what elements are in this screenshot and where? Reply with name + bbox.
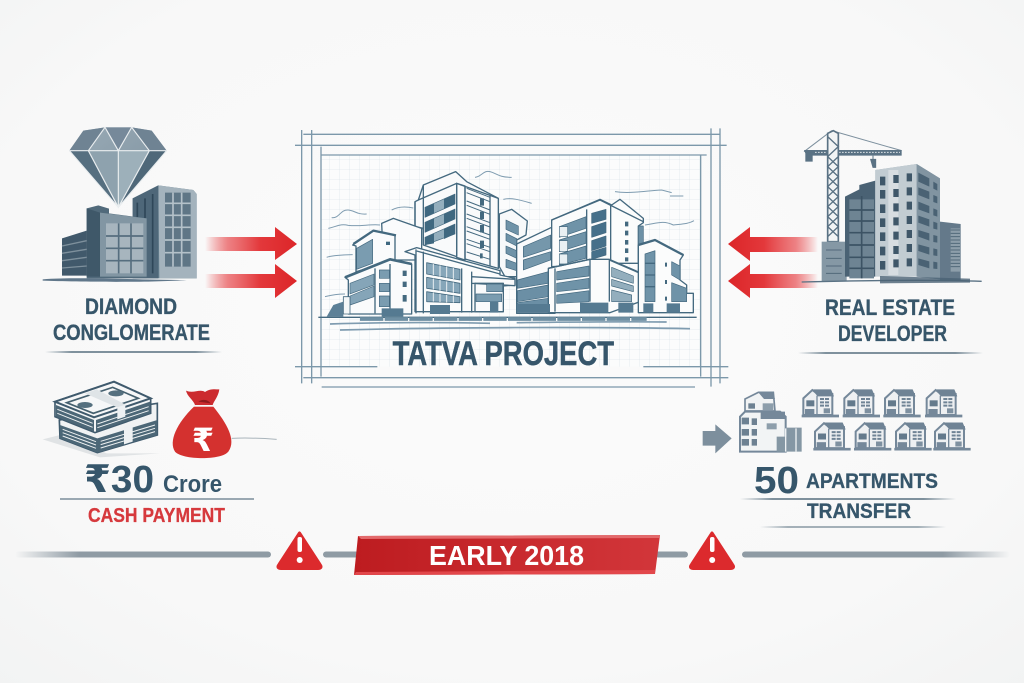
right lower block xyxy=(548,259,642,313)
amount: 30 crore xyxy=(84,459,222,501)
left back block xyxy=(382,218,422,260)
base details xyxy=(327,302,343,317)
panel: apartments transfer xyxy=(703,389,971,528)
amount: 50 apartments: 50 xyxy=(754,460,799,502)
heading: diamond conglomerate: CONGLOMERATE xyxy=(53,320,210,345)
timeline xyxy=(15,533,1010,575)
arrows: from developer to project xyxy=(728,227,818,298)
label: cash payment: CASH PAYMENT xyxy=(88,505,225,527)
heading: diamond conglomerate xyxy=(53,294,210,345)
back tower xyxy=(499,209,527,277)
icon: apartment building and houses xyxy=(703,389,971,453)
timeline bar segments xyxy=(15,552,1010,558)
architectural building drawing xyxy=(327,172,693,317)
heading: real estate developer: DEVELOPER xyxy=(838,321,947,346)
central podium xyxy=(405,248,515,312)
icon: left warning triangle xyxy=(278,533,321,568)
blueprint grid xyxy=(322,155,700,367)
arrows: from conglomerate to project xyxy=(205,227,297,298)
banner: early 2018: EARLY 2018 xyxy=(429,540,584,571)
icon: diamond above office buildings xyxy=(43,127,197,282)
main tower xyxy=(415,172,498,268)
title: tatva project: TATVA PROJECT xyxy=(393,335,614,373)
left lower block xyxy=(345,259,412,314)
panel: real estate developer xyxy=(798,131,983,354)
right main block xyxy=(552,199,643,267)
panel: cash payment xyxy=(43,382,277,527)
middle wing xyxy=(517,227,555,313)
left upper block xyxy=(353,231,395,272)
icon: crane and tower buildings xyxy=(802,131,982,283)
bag rupee symbol: ₹ xyxy=(192,422,214,458)
heading: real estate developer xyxy=(825,295,955,346)
amount: 30 crore: ₹30 xyxy=(84,459,154,501)
heading: real estate developer: REAL ESTATE xyxy=(825,295,955,320)
amount: 30 crore: Crore xyxy=(163,471,222,498)
ground strokes xyxy=(318,315,697,319)
blueprint frame xyxy=(295,128,728,387)
icon: right warning triangle xyxy=(690,533,734,568)
amount: 50 apartments: APARTMENTS xyxy=(806,470,938,493)
panel: diamond conglomerate xyxy=(43,127,222,353)
amount: 50 apartments xyxy=(754,460,938,502)
far right block xyxy=(638,240,693,313)
panel: tatva project blueprint xyxy=(295,128,728,387)
heading: diamond conglomerate: DIAMOND xyxy=(85,294,177,319)
icon: banknote stacks and rupee money bag xyxy=(43,382,277,458)
label: transfer: TRANSFER xyxy=(807,500,911,523)
banner: early 2018 xyxy=(354,535,660,575)
sketch clouds xyxy=(325,171,694,297)
